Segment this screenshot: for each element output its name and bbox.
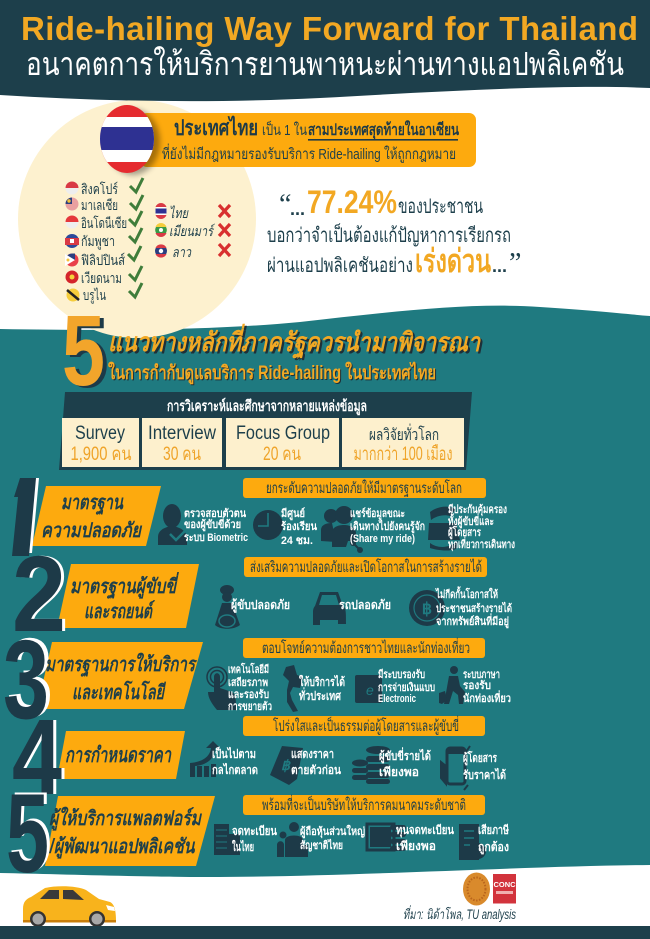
pill heading [243,715,485,736]
item text: ไม่กีดกั้นโอกาสให้ [435,586,498,601]
section 5: platform providers [6,769,509,896]
icon: building [214,824,240,855]
row: Vietnam: เวียดนาม [81,270,122,286]
list: countries with regulation [65,178,143,304]
pill heading: ตอบโจทย์ความต้องการชาวไทยและนักท่องเที่ยว [262,637,470,657]
ribbon text [49,806,202,859]
big number 4: 4 [15,696,65,817]
ribbon text: มาตรฐานการให้บริการ [45,652,197,678]
row: Indonesia: อินโดนีเซีย [81,215,127,231]
item text: เทคโนโลยีมี [228,662,269,676]
item text: ร้องเรียน [281,520,317,533]
item text: สัญชาติไทย [300,838,343,852]
item text [379,747,431,779]
item text: ผู้โดยสาร [463,750,497,766]
icon: market chart [190,741,220,777]
icon: e-wallet [355,675,382,703]
big number 5: 5 [6,771,49,896]
item text: ผู้โดยสาร [448,525,481,540]
big number 5: 5 [62,295,105,407]
item text [228,662,272,713]
pill heading: โปร่งใสและเป็นธรรมต่อผู้โดยสารและผู้ขับขี่ [273,715,459,735]
item text [291,747,342,777]
item text: มีประกันคุ้มครอง [448,503,507,517]
icon: coin stacks [352,746,390,784]
pill heading: ยกระดับความปลอดภัยให้มีมาตรฐานระดับโลก [266,479,462,497]
cell: global research [342,418,464,467]
item text: และรองรับ [228,688,269,701]
ribbon text [70,572,179,623]
pill heading: พร้อมที่จะเป็นบริษัทให้บริการคมนาคมระดับชาติ [262,794,466,814]
quote: 77.24%: ผ่านแอปพลิเคชันอย่าง [267,255,413,277]
item text [300,824,365,852]
icon: touch technology [207,667,236,710]
ribbon text: ผู้ให้บริการแพลตฟอร์ม [49,806,202,831]
quote: 77.24%: บอกว่าจำเป็นต้องแก้ปัญหาการเรียกรถ [267,222,511,247]
item text [232,824,278,854]
section 1: safety [12,478,515,556]
row: Laos: ลาว [172,244,192,260]
row: Myanmar: เมียนมาร์ [169,223,215,239]
item text: แชร์ข้อมูลขณะ [350,507,405,521]
heading: 5 guidelines [62,295,483,409]
big number 3: 3 [7,615,53,740]
section 4: pricing [12,696,506,817]
item text: ผู้ขับปลอดภัย [231,598,290,613]
footer bar [0,926,650,939]
banner text: ที่ยังไม่มีกฎหมายรองรับบริการ Ride-hailing ให้ถูกกฎหมาย [162,143,456,163]
row: Cambodia: กัมพูชา [81,233,115,250]
ribbon text: /ผู้พัฒนาแอปพลิเคชัน [49,835,196,859]
icon: shareholders [277,822,308,857]
title: Ride-hailing Way Forward for Thailand [21,10,638,47]
list: countries without regulation [155,203,230,260]
label ribbon [57,564,199,628]
icon: baht coin: ฿ [422,601,432,618]
cream circle panel [18,100,256,338]
item text: ทุนจดทะเบียน [396,823,455,838]
item text: ระบบภาษา [463,669,500,681]
banner: Thailand statement [140,113,476,167]
item text [435,586,512,629]
icon: car front [313,592,346,625]
icon: yellow car [23,886,116,927]
ribbon text: มาตรฐานผู้ขับขี่ [70,572,179,600]
heading lines: ในการกำกับดูแลบริการ Ride-hailing ในประเทศไทย [109,362,437,386]
pill heading [243,794,485,815]
item text: ระบบ Biometric [184,532,248,544]
ribbon text [41,492,143,542]
icon: e-wallet: e [366,682,374,698]
item text: แสดงราคา [291,747,334,761]
item text: ตรวจสอบตัวตน [184,507,246,520]
quote: 77.24%: “ [279,189,291,220]
quote: 77.24% [267,184,521,279]
cell: global research: มากกว่า 100 เมือง [354,444,452,465]
big number 5: 5 [9,769,52,894]
big number 2: 2 [15,533,69,654]
pill heading [244,557,487,577]
item text [350,507,425,545]
label ribbon [32,486,161,546]
item text: ถูกต้อง [478,840,509,855]
heading lines: แนวทางหลักที่ภาครัฐควรนำมาพิจารณา [108,323,481,360]
item text [448,503,515,552]
panel: research sources [59,392,472,470]
row: Malaysia: มาเลเซีย [81,197,118,213]
cell: Survey [62,418,139,467]
item text [184,507,248,544]
item text: รับราคาได้ [463,767,506,782]
item text: เพียงพอ [379,765,419,779]
quote: 77.24%: ” [509,248,521,279]
icon: traveller [439,666,465,704]
icon: tax document [459,824,486,860]
item text: ในไทย [232,839,254,854]
cell: Focus Group: Focus Group [236,423,330,444]
banner text: เป็น 1 ใน [262,120,307,139]
icon: Thai flag [100,105,160,175]
item text [478,823,509,855]
ribbon text: การกำหนดราคา [65,744,172,767]
icon: certificate and coins [367,824,406,851]
row: Brunei: บรูไน [83,287,106,304]
item text: เดินทางไปยังคนรู้จัก [350,519,425,534]
section 3: service and technology [3,615,511,742]
source note: ที่มา: นิด้าโพล, TU analysis [403,905,516,922]
teal main panel [0,306,650,877]
logo: CONC: CONC [493,880,516,889]
cell: Focus Group: 20 คน [263,444,301,465]
item text: การขยายตัว [228,700,272,713]
label ribbon [57,731,185,779]
item text [212,746,258,777]
item text: ทุกเที่ยวการเดินทาง [448,536,515,552]
cell: global research: ผลวิจัยทั่วโลก [369,423,439,444]
ribbon text [45,652,197,704]
icon: price tag: ฿ [281,757,291,773]
item text: ของผู้ขับขี่ด้วย [184,516,241,532]
icon: biometric person [158,504,187,545]
banner text: สามประเทศสุดท้ายในอาเซียน [308,120,459,140]
big number 5: 5 [66,297,109,409]
big number 3: 3 [3,617,49,742]
item text: ให้บริการได้ [299,674,345,689]
item text [281,507,317,547]
section 2: driver and vehicle [12,533,512,654]
item text: ประชาชนสร้างรายได้ [436,601,512,615]
icon: people sharing [321,506,363,553]
item text [463,669,511,705]
item text: จดทะเบียน [232,824,278,838]
cell: Survey: 1,900 คน [70,444,132,465]
banner text [162,115,459,163]
item text: ผู้ขับขี่รายได้ [379,747,431,764]
ribbon text: มาตรฐาน [61,492,124,516]
item text: เสียภาษี [478,823,509,837]
quote: 77.24%: ... [492,256,507,276]
cell: Survey: Survey [75,423,125,444]
item text: ผู้ถือหุ้นส่วนใหญ่ [300,824,365,839]
cell: Interview: Interview [148,423,216,444]
item text [299,674,345,703]
quote: 77.24%: ... [290,199,305,219]
icon: insurance hands and car [428,507,460,551]
item text: (Share my ride) [350,533,415,545]
item text [378,668,435,705]
item text: เสถียรภาพ [228,676,268,689]
label ribbon [37,642,203,709]
row: Philippines: ฟิลิปปินส์ [81,252,125,268]
header band [0,0,650,101]
item text: จากทรัพย์สินที่มีอยู่ [436,613,509,629]
item text: เป็นไปตาม [212,746,256,761]
quote: 77.24%: เร่งด่วน [415,243,491,279]
big number 2: 2 [12,533,66,654]
panel heading: การวิเคราะห์และศึกษาจากหลายแหล่งข้อมูล [167,397,367,416]
item text: เพียงพอ [396,839,436,853]
item text: รองรับ [463,679,491,692]
logo: CONC [493,874,516,904]
item text: มีศูนย์ [281,507,305,521]
quote: 77.24%: 77.24% [307,184,397,220]
cell: Interview: 30 คน [163,444,201,465]
item text: ตายตัวก่อน [291,763,342,777]
heading lines: ในการกำกับดูแลบริการ Ride-hailing ในประเทศไทย [108,361,436,385]
ribbon text: และเทคโนโลยี [72,680,166,704]
item text: การจ่ายเงินแบบ [378,681,435,694]
pill heading [243,637,485,658]
ribbon text: และรถยนต์ [84,600,155,623]
icon: price tag [270,746,303,785]
cell: Focus Group [226,418,339,467]
row: Thailand: ไทย [169,205,189,221]
heading lines: แนวทางหลักที่ภาครัฐควรนำมาพิจารณา [110,325,483,362]
icon: phone [441,746,470,790]
ribbon text: ความปลอดภัย [41,520,143,542]
title [21,10,638,82]
item text: ทั้งผู้ขับขี่และ [448,513,494,529]
heading lines [108,323,483,386]
item text: 24 ชม. [281,535,313,547]
item text: รถปลอดภัย [339,598,391,612]
icon: baht coin [409,590,445,626]
item text: ทั่วประเทศ [299,687,341,703]
item text: Electronic [378,693,416,705]
item text [463,750,506,782]
item text [396,823,455,853]
item text: นักท่องเที่ยว [463,690,511,705]
cell: Interview [142,418,222,467]
big number 4: 4 [12,696,62,817]
icon: clock [253,510,283,540]
quote: 77.24%: ของประชาชน [398,196,483,218]
icon: Thailand map [283,665,303,712]
pill heading: ส่งเสริมความปลอดภัยและเปิดโอกาสในการสร้างรายได้ [250,558,482,576]
logo: university seal [463,872,490,906]
pill heading [243,478,486,498]
label ribbon [45,796,215,866]
icon: driver [215,585,240,629]
item text: มีระบบรองรับ [378,668,425,681]
big number 1 [12,478,39,556]
item text: กลไกตลาด [212,762,258,777]
row: Singapore: สิงคโปร์ [81,181,118,197]
banner text: ประเทศไทย [174,115,258,140]
